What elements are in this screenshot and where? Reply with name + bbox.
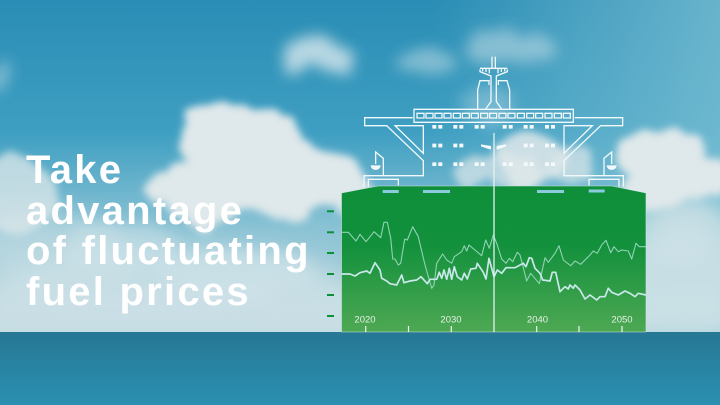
hull — [342, 186, 646, 332]
title: Take — [26, 148, 123, 192]
title: of fluctuating — [26, 229, 311, 273]
year axis — [354, 314, 633, 332]
center line — [493, 133, 495, 332]
axis tick marks — [327, 210, 334, 317]
ship illustration — [327, 56, 646, 332]
icon: right crane — [604, 152, 617, 175]
year axis: 2050 — [611, 314, 633, 326]
title: fuel prices — [26, 270, 251, 314]
thick price line — [342, 258, 646, 300]
title — [26, 148, 311, 314]
year axis: 2030 — [440, 314, 462, 326]
right wing — [564, 118, 623, 187]
left wing — [364, 118, 423, 187]
bridge deck with windows — [414, 109, 573, 122]
title: advantage — [26, 188, 244, 232]
thin price line — [342, 222, 646, 288]
deck dashes — [383, 190, 605, 193]
line chart: fuel prices — [342, 222, 646, 300]
icon: left crane — [371, 152, 383, 175]
ship superstructure line art — [364, 57, 623, 187]
icon: bow markers — [481, 144, 506, 150]
year axis: 2020 — [354, 314, 376, 326]
cabin windows — [432, 125, 555, 166]
year axis: 2040 — [527, 314, 548, 326]
icon: mast and funnel — [478, 57, 510, 109]
